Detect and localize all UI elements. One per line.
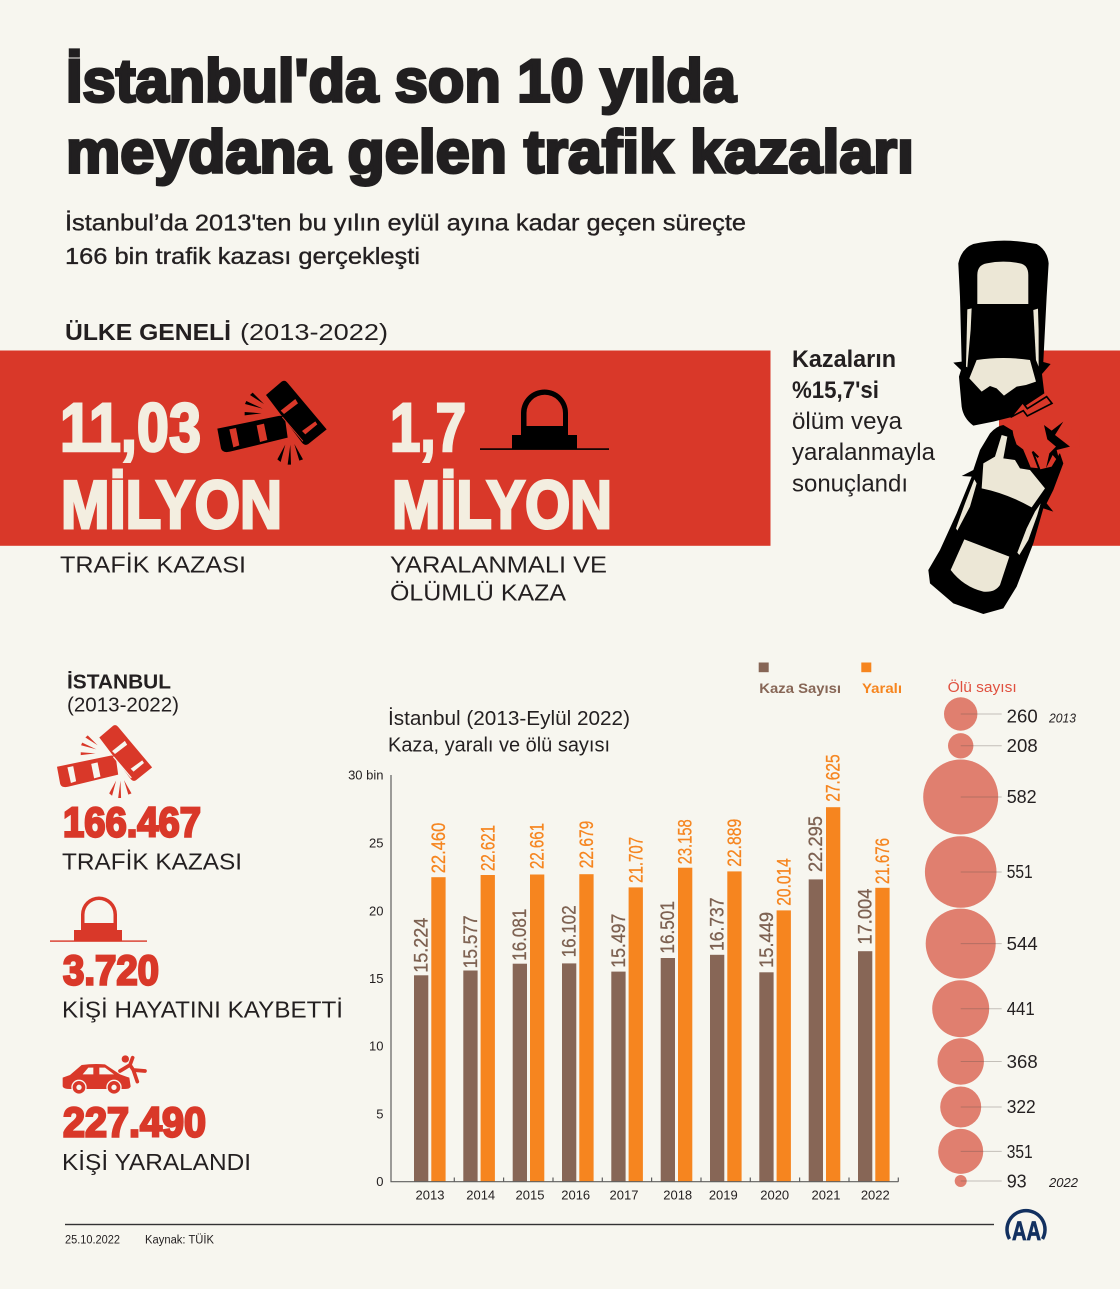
stat: 166.467 traffic accidents: 166.467 (63, 798, 201, 846)
heading: Istanbul (67, 670, 179, 716)
bubble chart: deaths: 544 (1007, 934, 1038, 954)
chart title: Kaza, yaralı ve ölü sayısı (388, 734, 610, 756)
bubble chart: deaths: 582 (1007, 787, 1037, 807)
bubble chart: deaths: 351 (1007, 1142, 1033, 1162)
stat: 11,03 million: MİLYON (61, 467, 282, 543)
orange value labels: 20.014 (774, 858, 795, 906)
title (66, 48, 914, 186)
legend: deaths: Ölü sayısı (948, 678, 1017, 696)
brown value labels: 15.224 (412, 917, 432, 973)
stat: 11,03 million: 11,03 (60, 389, 201, 466)
red band (0, 350, 1120, 546)
footer (65, 1224, 994, 1246)
title: İstanbul'da son 10 yılda (66, 48, 737, 114)
callout: percent: %15,7'si (792, 377, 879, 404)
brown value labels: 16.737 (708, 898, 728, 951)
brown value labels: 15.577 (461, 915, 482, 968)
callout: percent: ölüm veya (792, 408, 903, 435)
stat: 1,7 million (390, 389, 612, 543)
brown value labels: 16.102 (560, 905, 580, 957)
brown value labels (412, 816, 876, 973)
legend: Kaza Sayısı (759, 680, 841, 696)
brown value labels: 16.081 (510, 909, 531, 961)
icon: gravestone red (50, 896, 147, 942)
bubble chart: deaths: 551 (1007, 862, 1033, 882)
label: injury and fatal accident: ÖLÜMLÜ KAZA (390, 580, 567, 606)
orange value labels (429, 754, 894, 906)
orange value labels: 22.661 (528, 823, 549, 869)
stat: 227.490 injured: KİŞİ YARALANDI (62, 1149, 251, 1175)
chart title (388, 707, 630, 756)
heading: national: ÜLKE GENELİ (65, 319, 231, 345)
bubble chart: deaths: 2022 (1048, 1176, 1078, 1190)
orange value labels: 22.621 (478, 825, 499, 871)
bubble chart: deaths: 93 (1007, 1171, 1027, 1191)
orange value labels: 22.889 (725, 819, 746, 867)
stat: 166.467 traffic accidents: TRAFİK KAZASI (62, 848, 242, 874)
brown value labels: 15.497 (609, 914, 630, 968)
heading: national: (2013-2022) (240, 319, 388, 345)
subtitle: İstanbul’da 2013'ten bu yılın eylül ayına kadar geçen süreçte (65, 210, 746, 236)
y axis labels: 25 (369, 836, 384, 850)
label: traffic accident: TRAFİK KAZASI (60, 552, 246, 578)
y axis labels: 10 (369, 1039, 384, 1054)
bubble chart: deaths: 2013 (1048, 711, 1076, 725)
y axis labels: 30 bin (348, 768, 384, 782)
footer: Kaynak: TÜİK (145, 1234, 214, 1246)
year labels: 2016 (561, 1187, 590, 1202)
icon: crash black (217, 381, 327, 465)
stat: 227.490 injured (62, 1098, 251, 1175)
year labels: 2014 (466, 1187, 495, 1202)
y axis labels: 15 (369, 971, 384, 986)
orange value labels: 21.676 (873, 838, 894, 884)
orange value labels: 23.158 (676, 819, 697, 864)
stat: 3.720 deaths (62, 946, 343, 1022)
legend: Yaralı (862, 680, 902, 696)
title: meydana gelen trafik kazaları (66, 118, 914, 186)
stat: 11,03 million (60, 389, 282, 543)
label: injury and fatal accident: YARALANMALI VE (390, 552, 607, 578)
subtitle: 166 bin trafik kazası gerçekleşti (65, 243, 420, 269)
stat: 166.467 traffic accidents (62, 798, 242, 874)
year labels: 2013 (416, 1187, 444, 1202)
y axis labels: 5 (376, 1106, 384, 1122)
heading: Istanbul: İSTANBUL (67, 670, 171, 694)
year labels: 2019 (709, 1187, 738, 1202)
subtitle (65, 210, 746, 269)
heading: national (65, 319, 388, 345)
heading: Istanbul: (2013-2022) (67, 694, 179, 716)
orange value labels: 27.625 (824, 754, 845, 802)
year labels: 2017 (610, 1187, 638, 1202)
bubble chart: deaths: 208 (1007, 736, 1038, 756)
callout: percent: sonuçlandı (792, 470, 908, 498)
orange value labels: 22.679 (577, 821, 598, 868)
icon: car hits pedestrian (63, 1055, 145, 1095)
y axis labels: 0 (376, 1174, 384, 1189)
icon: crash red (57, 725, 152, 798)
year labels: 2020 (760, 1187, 789, 1202)
year labels (416, 1187, 890, 1202)
brown value labels: 15.449 (757, 912, 778, 968)
bar chart (348, 754, 898, 1202)
bubble chart: deaths: 322 (1007, 1097, 1036, 1117)
orange value labels: 21.707 (626, 837, 647, 883)
bubble chart: deaths (923, 697, 1078, 1191)
footer: 25.10.2022 (65, 1234, 120, 1246)
icon: gravestone black (480, 389, 609, 450)
callout: percent: Kazaların (792, 346, 896, 373)
brown bars: accidents (414, 879, 872, 1182)
illustration: top car (953, 241, 1052, 426)
stat: 3.720 deaths: 3.720 (63, 946, 159, 994)
logo: AA: AA (1012, 1216, 1041, 1246)
brown value labels: 22.295 (806, 816, 827, 872)
chart title: İstanbul (2013-Eylül 2022) (388, 707, 630, 730)
callout: percent (792, 346, 936, 498)
y axis labels: 20 (369, 903, 384, 918)
stat: 1,7 million: MİLYON (392, 467, 612, 543)
logo: AA (1007, 1211, 1045, 1246)
orange bars: injured (431, 807, 890, 1182)
bubble chart: deaths: 260 (1007, 706, 1038, 726)
stat: 1,7 million: 1,7 (390, 389, 466, 466)
year labels: 2022 (861, 1187, 890, 1202)
bubble chart: deaths: 368 (1007, 1052, 1038, 1072)
orange value labels: 22.460 (429, 823, 450, 873)
y axis labels (348, 768, 384, 1189)
year labels: 2021 (812, 1187, 840, 1202)
callout: percent: yaralanmayla (792, 439, 936, 466)
legend (759, 662, 902, 696)
stat: 3.720 deaths: KİŞİ HAYATINI KAYBETTİ (62, 996, 343, 1022)
label: injury and fatal accident (390, 552, 607, 606)
year labels: 2015 (516, 1187, 544, 1202)
brown value labels: 16.501 (658, 901, 679, 954)
bubble chart: deaths: 441 (1007, 999, 1035, 1019)
brown value labels: 17.004 (856, 888, 876, 945)
axes (391, 775, 898, 1182)
year labels: 2018 (663, 1187, 692, 1202)
illustration: bottom car (928, 420, 1080, 614)
stat: 227.490 injured: 227.490 (63, 1098, 206, 1146)
